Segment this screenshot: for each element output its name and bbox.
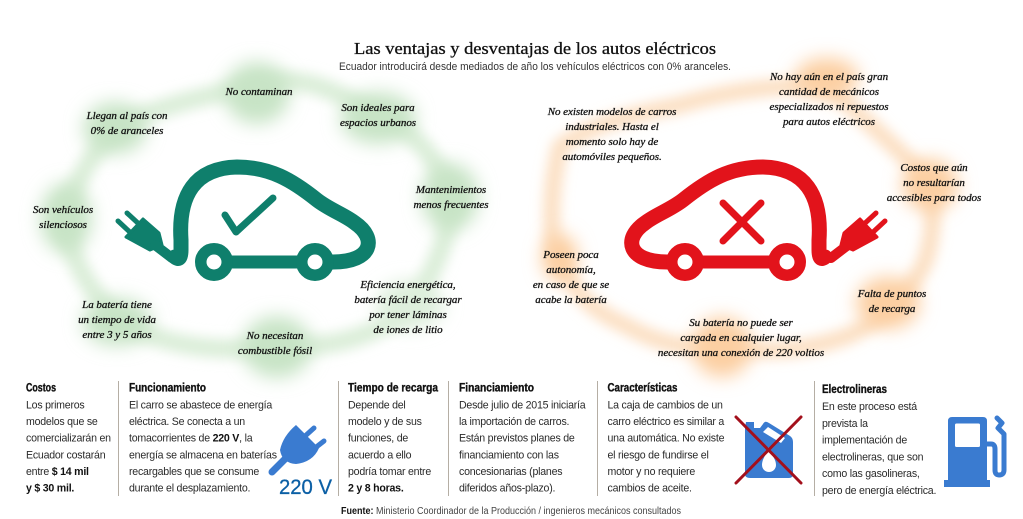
panel: Electrolineras: electrolineras, que son: [822, 451, 924, 463]
label: Eficiencia: Eficiencia energética,: [360, 279, 456, 291]
panel: Electrolineras: En este proceso está: [822, 401, 917, 413]
label: Son ideales: espacios urbanos: [340, 117, 416, 129]
panel: Costos: Costos: [26, 382, 56, 394]
panel: Tiempo de recarga: modelo y de sus: [348, 416, 422, 428]
panel: Financiamiento: Desde julio de 2015 iniciaría: [459, 400, 585, 412]
panel: Electrolineras: Electrolineras: [822, 384, 887, 396]
panel: Costos: Ecuador costarán: [26, 449, 106, 461]
panel: Funcionamiento: tomacorrientes de: [129, 433, 213, 445]
panel: Tiempo de recarga: podría tomar entre: [348, 466, 431, 478]
panel: Características: Características: [608, 382, 678, 394]
label: Son vehículos: silenciosos: [39, 219, 87, 231]
panel: Funcionamiento: durante el desplazamiento.: [129, 482, 250, 494]
icon: green electric car with check mark: [118, 167, 368, 275]
panel: Electrolineras: [822, 384, 936, 497]
panel: Financiamiento: financiamiento con las: [459, 449, 559, 461]
icon: electric charging pump: [944, 417, 1004, 487]
panel: Electrolineras: prevista la: [822, 418, 868, 430]
panel: Electrolineras: como las gasolineras,: [822, 468, 920, 480]
label: Costos: no resultarían: [903, 177, 965, 189]
panel: Costos: y $ 30 mil.: [26, 482, 74, 494]
label: La batería: un tiempo de vida: [78, 314, 156, 326]
panel: Tiempo de recarga: Depende del: [348, 400, 406, 412]
label: Son ideales: Son ideales para: [341, 102, 415, 114]
label: No necesitan: No necesitan: [247, 330, 303, 342]
label: Llegan al país: Llegan al país con: [87, 110, 167, 122]
green glow ring: [40, 62, 479, 378]
panel: Costos: [26, 382, 111, 494]
label: No hay mecánicos: No hay aún en el país gran: [770, 71, 888, 83]
panel: Funcionamiento: recargables que se consume: [129, 466, 259, 478]
panel: Características: el riesgo de fundirse el: [608, 449, 709, 461]
panel: Características: [608, 382, 725, 494]
label: Poseen poca autonomía: Poseen poca: [543, 249, 599, 261]
panel: Costos: entre: [26, 466, 52, 478]
label: Mantenimientos: Mantenimientos: [416, 184, 486, 196]
panel: Financiamiento: Financiamiento: [459, 382, 534, 394]
orange glow ring: [542, 58, 958, 377]
label: Su batería: Su batería no puede ser: [689, 317, 793, 329]
panel: Costos: comercializarán en: [26, 433, 111, 445]
panel: Tiempo de recarga: Tiempo de recarga: [348, 382, 439, 394]
panel: Financiamiento: la importación de carros.: [459, 416, 569, 428]
label: La batería: entre 3 y 5 años: [82, 329, 152, 341]
disadvantages labels: [533, 71, 981, 359]
label: Su batería: cargada en cualquier lugar,: [680, 332, 802, 344]
subtitle: Ecuador introducirá desde mediados de año los vehículos eléctricos con 0% aranceles.: [339, 61, 731, 73]
label: Falta de puntos: Falta de puntos: [858, 288, 926, 300]
panel: Características: La caja de cambios de un: [608, 400, 723, 412]
label: Poseen poca autonomía: acabe la batería: [535, 294, 607, 306]
label: Costos: accesibles para todos: [887, 192, 981, 204]
label: No existen modelos: No existen modelos de carros: [548, 106, 676, 118]
panel: Funcionamiento: El carro se abastece de energía: [129, 400, 272, 412]
advantages labels: [33, 86, 489, 357]
label: Son vehículos: Son vehículos: [33, 204, 93, 216]
panel: Características: motor y no requiere: [608, 466, 695, 478]
panel: Tiempo de recarga: funciones, de: [348, 433, 408, 445]
label: No existen modelos: momento solo hay de: [566, 136, 658, 148]
icon: crossed-out oil can: [736, 417, 801, 483]
icon: blue plug 220 V: 220 V: [279, 475, 333, 499]
label: No hay mecánicos: para autos eléctricos: [782, 116, 875, 128]
label: Eficiencia: batería fácil de recargar: [354, 294, 462, 306]
panel: Funcionamiento: energía se almacena en baterías: [129, 449, 277, 461]
label: Poseen poca autonomía: autonomía,: [546, 264, 596, 276]
panel: Características: una automática. No existe: [608, 433, 725, 445]
label: No existen modelos: automóviles pequeños.: [562, 151, 662, 163]
label: No hay mecánicos: especializados ni repuestos: [770, 101, 888, 113]
panel: Electrolineras: pero de energía eléctrica.: [822, 485, 936, 497]
panel: Costos: modelos que se: [26, 416, 98, 428]
panel: Financiamiento: [459, 382, 586, 494]
panel: Financiamiento: Están previstos planes de: [459, 433, 575, 445]
label: Mantenimientos: menos frecuentes: [413, 199, 489, 211]
panel: Costos: Los primeros: [26, 400, 84, 412]
label: Eficiencia: de iones de litio: [373, 324, 443, 336]
panel: Costos: $ 14 mil: [52, 466, 89, 478]
panel: Funcionamiento: Funcionamiento: [129, 382, 206, 394]
label: No necesitan: combustible fósil: [238, 345, 312, 357]
title: Las ventajas y desventajas de los autos eléctricos: [354, 39, 716, 58]
label: Poseen poca autonomía: en caso de que se: [533, 279, 609, 291]
panel: Financiamiento: concesionarias (planes: [459, 466, 562, 478]
panel: Características: carro eléctrico es similar a: [608, 416, 724, 428]
panel: Funcionamiento: [129, 382, 277, 494]
label: Falta de puntos: de recarga: [869, 303, 916, 315]
label: No contaminan: No contaminan: [224, 86, 293, 98]
label: Costos: Costos que aún: [900, 162, 968, 174]
label: Llegan al país: 0% de aranceles: [91, 125, 163, 137]
panel: Electrolineras: implementación de: [822, 435, 907, 447]
label: Su batería: necesitan una conexión de 220 voltios: [658, 347, 824, 359]
panel: Funcionamiento: eléctrica. Se conecta a un: [129, 416, 245, 428]
label: La batería: La batería tiene: [82, 299, 152, 311]
panel: Funcionamiento: 220 V, la: [213, 433, 252, 445]
icon: red electric car with X mark: [632, 167, 885, 275]
panel: Tiempo de recarga: [348, 382, 439, 494]
label: No existen modelos: industriales. Hasta el: [565, 121, 659, 133]
icon: blue plug 220 V: [272, 425, 333, 499]
label: Eficiencia: por tener láminas: [368, 309, 447, 321]
panel: Tiempo de recarga: acuerdo a ello: [348, 449, 412, 461]
panel: Financiamiento: diferidos años-plazo).: [459, 482, 555, 494]
label: No hay mecánicos: cantidad de mecánicos: [779, 86, 879, 98]
source: Fuente: Ministerio Coordinador de la Producción / ingenieros mecánicos consultados: [341, 506, 681, 517]
panel: Tiempo de recarga: 2 y 8 horas.: [348, 482, 404, 494]
panel: Características: cambios de aceite.: [608, 482, 692, 494]
